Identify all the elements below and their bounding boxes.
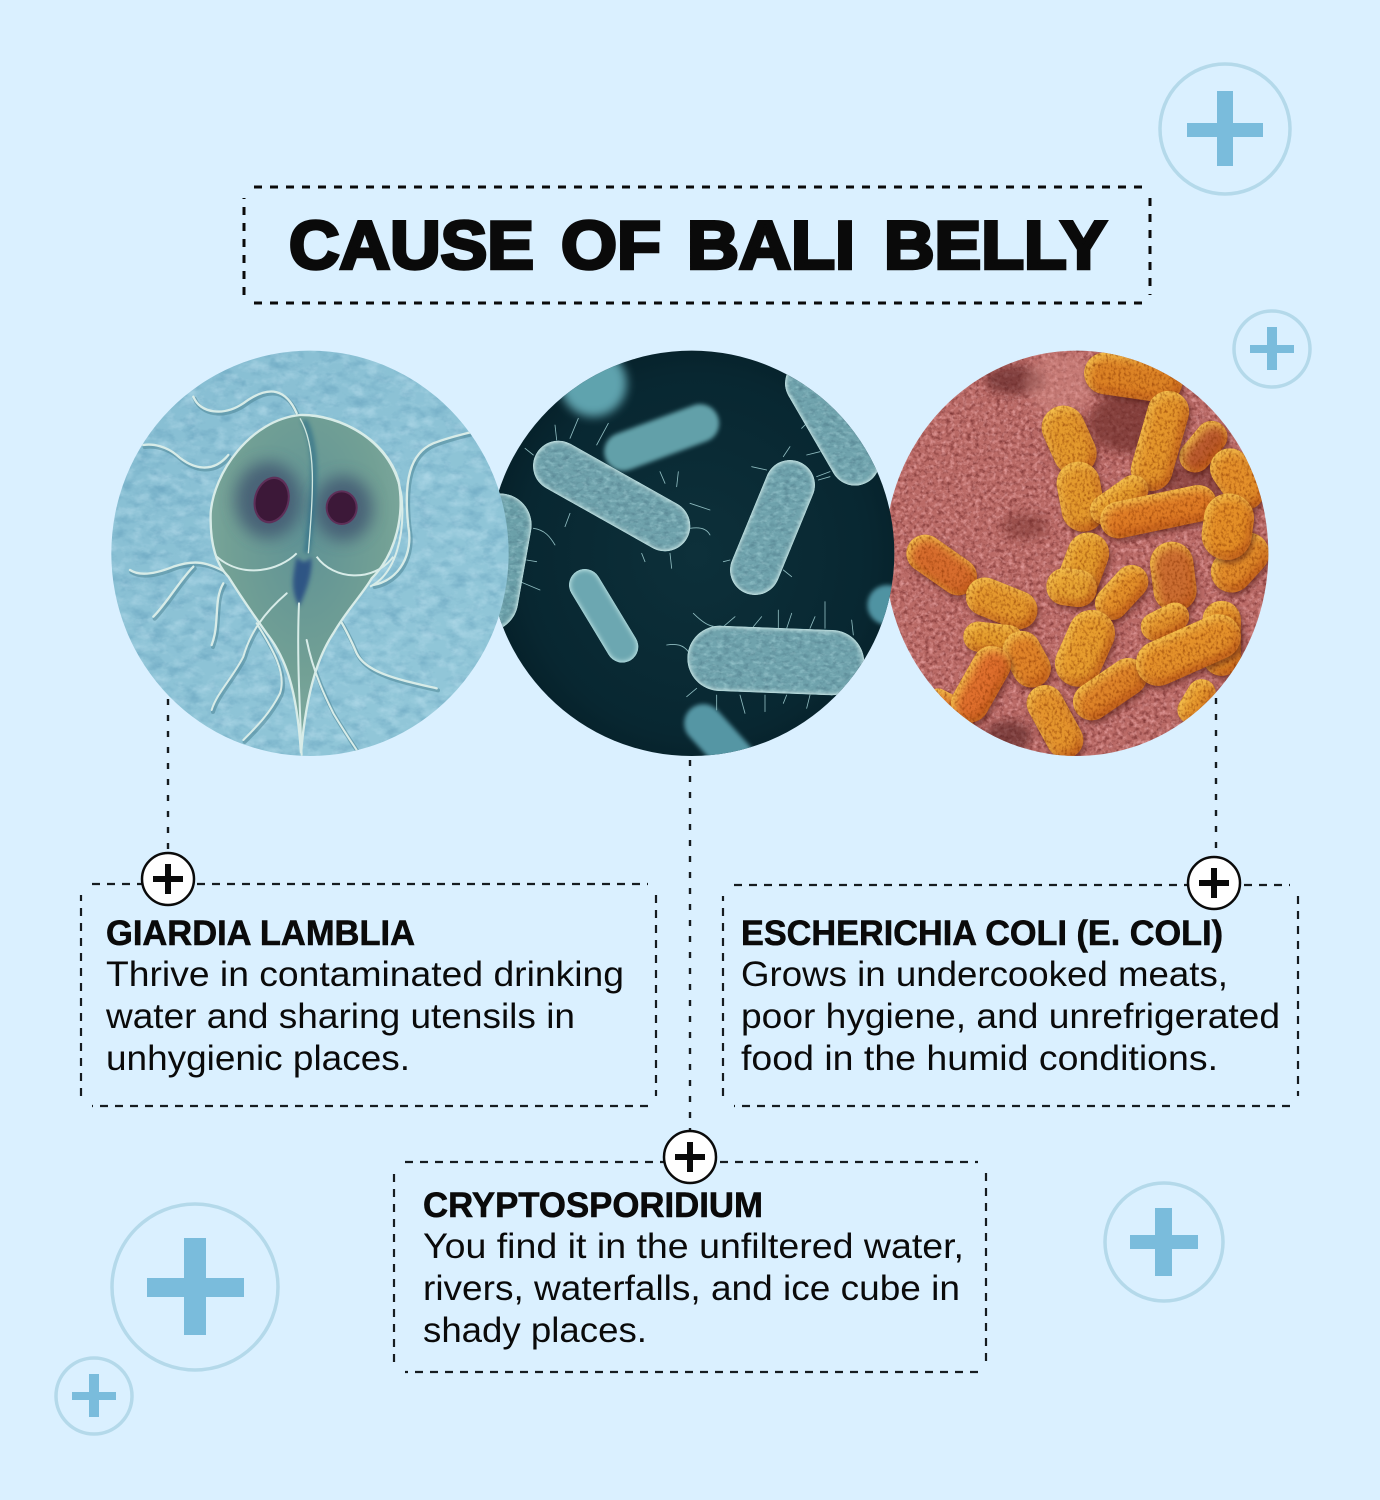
body text: Grows in undercooked meats,: [741, 955, 1228, 994]
title: BALI: [687, 208, 855, 284]
body text: You find it in the unfiltered water,: [423, 1227, 964, 1266]
panel: cryptosporidium: [394, 1131, 986, 1372]
panel: escherichia coli: [723, 857, 1298, 1106]
body text: [423, 1227, 964, 1350]
title: OF: [561, 208, 661, 284]
connector: e. coli: [1215, 698, 1217, 858]
title box: [244, 187, 1150, 303]
image: giardia lamblia parasite: [111, 350, 509, 756]
body text: food in the humid conditions.: [741, 1039, 1218, 1078]
body text: shady places.: [423, 1311, 647, 1350]
decorative icon: large plus top right: [1160, 64, 1290, 194]
body text: poor hygiene, and unrefrigerated: [741, 997, 1280, 1036]
body text: [105, 955, 624, 1078]
panel: giardia lamblia: [81, 853, 656, 1106]
body text: [741, 955, 1280, 1078]
body text: water and sharing utensils in: [105, 997, 575, 1036]
plus badge: [664, 1131, 716, 1183]
title: CAUSE: [289, 208, 534, 284]
title: BELLY: [884, 208, 1107, 284]
body text: Thrive in contaminated drinking: [106, 955, 624, 994]
heading: ESCHERICHIA COLI (E. COLI): [741, 914, 1223, 953]
plus badge: [1188, 857, 1240, 909]
image: cryptosporidium teal bacteria on dark background: [499, 350, 894, 756]
decorative icon: medium plus bottom right: [1105, 1183, 1223, 1301]
connector: giardia: [167, 699, 169, 853]
plus badge: [142, 853, 194, 905]
title: [289, 208, 1107, 284]
image: E. coli orange bacteria on pink tissue: [890, 350, 1268, 756]
connector: cryptosporidium: [689, 760, 691, 1131]
heading: CRYPTOSPORIDIUM: [423, 1186, 763, 1225]
decorative icon: large plus bottom left: [112, 1204, 278, 1370]
body text: rivers, waterfalls, and ice cube in: [423, 1269, 960, 1308]
decorative icon: small plus bottom left: [56, 1358, 132, 1434]
decorative icon: small plus top right: [1234, 311, 1310, 387]
body text: unhygienic places.: [106, 1039, 410, 1078]
heading: GIARDIA LAMBLIA: [106, 914, 415, 953]
